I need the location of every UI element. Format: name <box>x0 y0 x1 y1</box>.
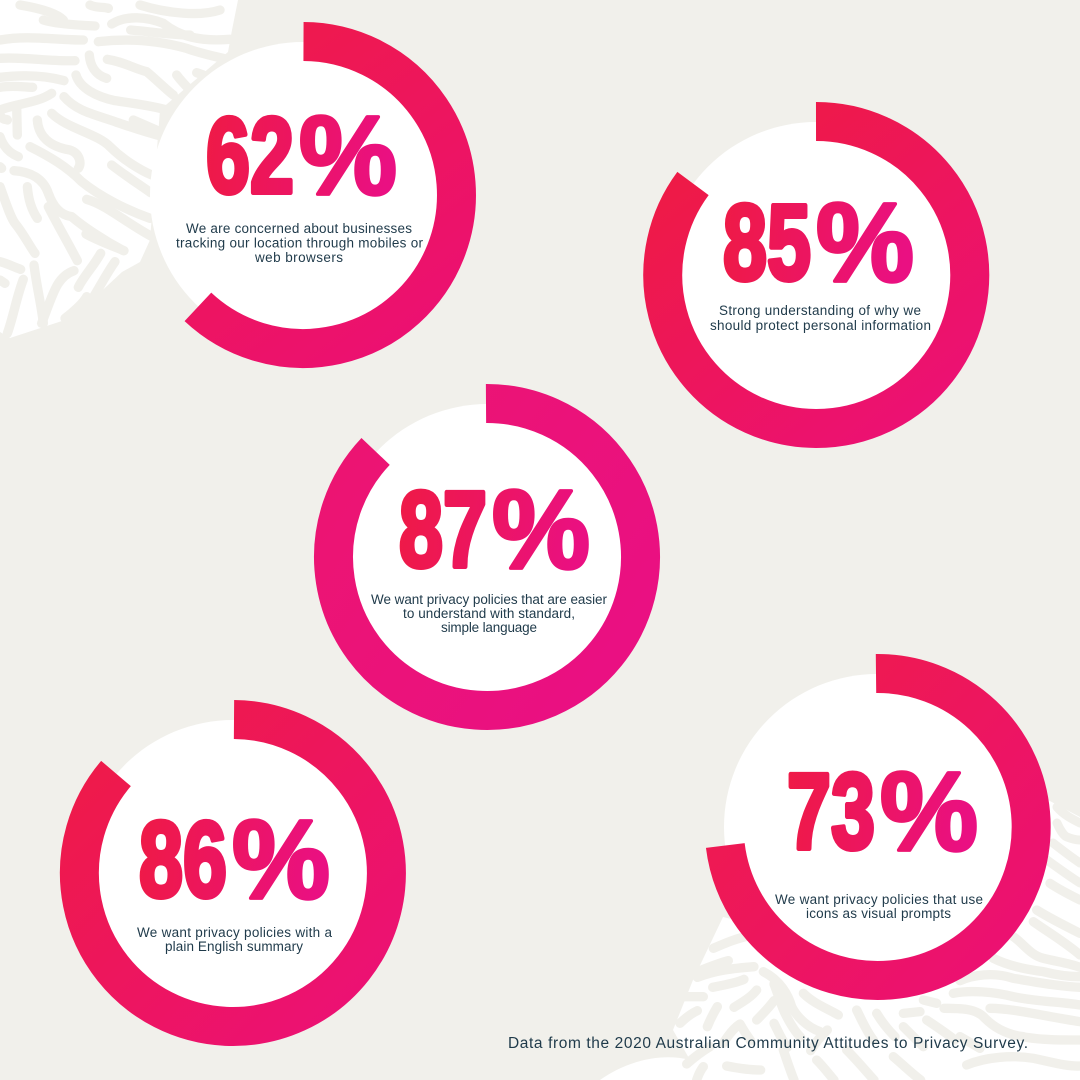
caption 86 <box>137 925 332 954</box>
source note: Data from the 2020 Australian Community Attitudes to Privacy Survey. <box>508 1035 1028 1052</box>
caption 87: simple language <box>441 620 537 635</box>
number 85 percent: % <box>816 180 914 305</box>
donut card: 87 percent <box>334 403 641 710</box>
progress ring 85 <box>663 121 970 428</box>
number 73 percent: % <box>880 749 978 874</box>
caption 85: should protect personal information <box>710 318 931 333</box>
number 86 percent: 86 <box>139 798 227 920</box>
number 86 percent <box>139 797 330 922</box>
number 73 percent: 73 <box>787 750 875 872</box>
donut card: 85 percent <box>663 121 970 428</box>
donut card: 62 percent <box>150 42 456 348</box>
white disc 86 <box>80 720 386 1026</box>
number 87 percent: 87 <box>399 468 487 590</box>
progress ring 86 <box>79 720 386 1026</box>
white disc 87 <box>334 404 640 710</box>
caption 62: tracking our location through mobiles or <box>176 236 424 250</box>
number 87 percent <box>399 467 590 592</box>
number 85 percent: 85 <box>723 182 811 302</box>
caption 73: We want privacy policies that use <box>775 892 983 907</box>
caption 62 <box>176 221 424 265</box>
caption 62: web browsers <box>254 250 343 265</box>
number 62 percent <box>206 93 397 218</box>
caption 86: plain English summary <box>165 939 303 954</box>
decorative pattern: bottom-right blob <box>600 800 1080 1080</box>
caption 73 <box>775 892 983 921</box>
caption 87: We want privacy policies that are easier <box>371 592 608 607</box>
progress ring 73 <box>725 673 1031 980</box>
caption 85 <box>710 303 931 333</box>
caption 87: to understand with standard, <box>403 606 575 621</box>
number 62 percent: % <box>299 93 397 218</box>
decorative pattern: top-left blob <box>0 0 238 338</box>
number 86 percent: % <box>232 797 330 922</box>
caption 73: icons as visual prompts <box>806 906 951 921</box>
progress ring 87 <box>334 403 641 710</box>
white disc 85 <box>663 122 969 428</box>
progress ring 62 <box>198 42 456 348</box>
number 87 percent: % <box>492 467 590 592</box>
caption 85: Strong understanding of why we <box>719 303 921 318</box>
number 73 percent <box>787 749 978 874</box>
caption 62: We are concerned about businesses <box>186 221 412 236</box>
donut card: 86 percent <box>79 720 386 1026</box>
white disc 73 <box>724 674 1030 980</box>
donut card: 73 percent <box>724 673 1031 980</box>
number 85 percent <box>723 180 914 305</box>
caption 86: We want privacy policies with a <box>137 925 332 940</box>
number 62 percent: 62 <box>206 94 294 216</box>
caption 87 <box>371 592 608 635</box>
white disc 62 <box>150 42 456 348</box>
